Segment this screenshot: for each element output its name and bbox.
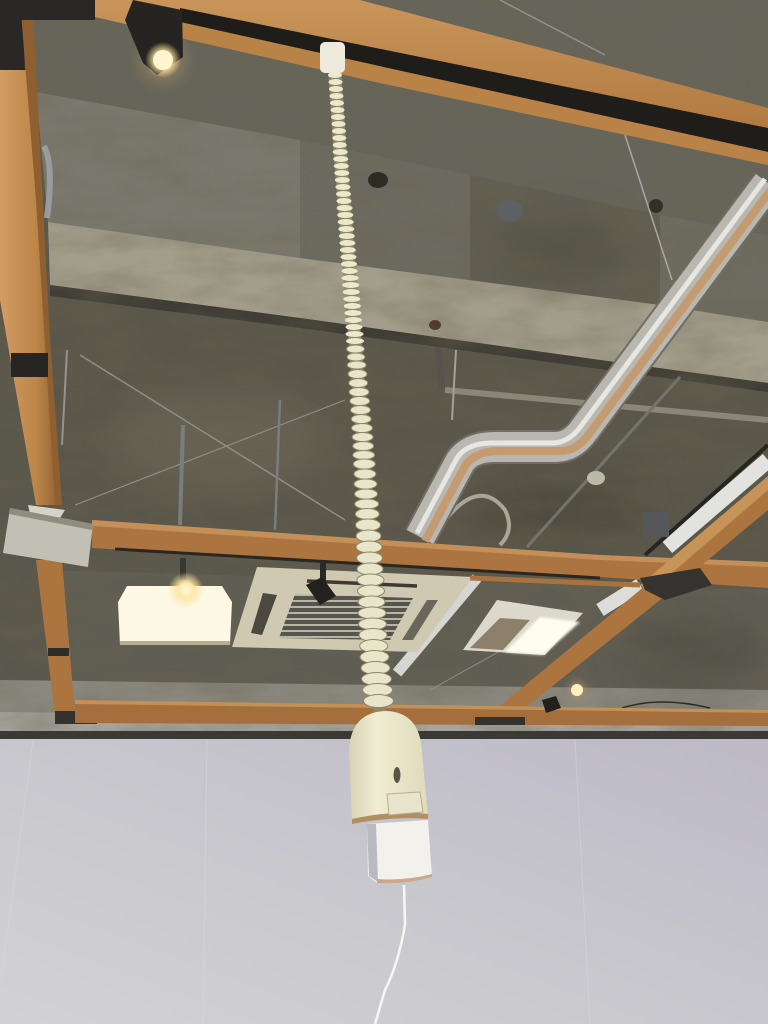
concrete ceiling (0, 0, 768, 740)
concrete shading patches (110, 215, 760, 685)
small spotlights (542, 675, 592, 713)
wood beam top (0, 0, 768, 165)
silver insulated duct (417, 179, 768, 541)
white conduit right (397, 445, 768, 673)
cord ceiling cap (320, 42, 345, 73)
upper coils (328, 72, 364, 344)
spotlight top (125, 0, 197, 94)
wood beam diagonal right (493, 476, 768, 716)
wood beam middle (92, 520, 768, 588)
concrete texture (0, 0, 768, 735)
grille (279, 594, 413, 640)
ceiling light panel left (118, 558, 232, 645)
right vent slot (402, 600, 438, 640)
white power adapter (367, 820, 432, 883)
speaker left (3, 505, 93, 567)
lower coils (346, 345, 394, 708)
wall (0, 738, 768, 1024)
cord backing (335, 75, 380, 712)
white cable (375, 885, 405, 1024)
ceiling light panel right (463, 600, 583, 655)
ceiling holes and fittings (44, 146, 663, 485)
concrete cross beam (48, 222, 768, 392)
wall panel seams (1, 740, 590, 1024)
wood beam bottom (75, 700, 768, 726)
plug housing (349, 711, 428, 824)
coiled power cord (328, 72, 394, 712)
wall top edge (0, 731, 768, 739)
track spotlight on panel (306, 563, 336, 605)
air conditioner panel (232, 567, 473, 652)
rail (307, 581, 417, 586)
left vent slot (251, 593, 277, 635)
thin conduits and wires (62, 0, 768, 708)
wood post left (0, 10, 97, 724)
